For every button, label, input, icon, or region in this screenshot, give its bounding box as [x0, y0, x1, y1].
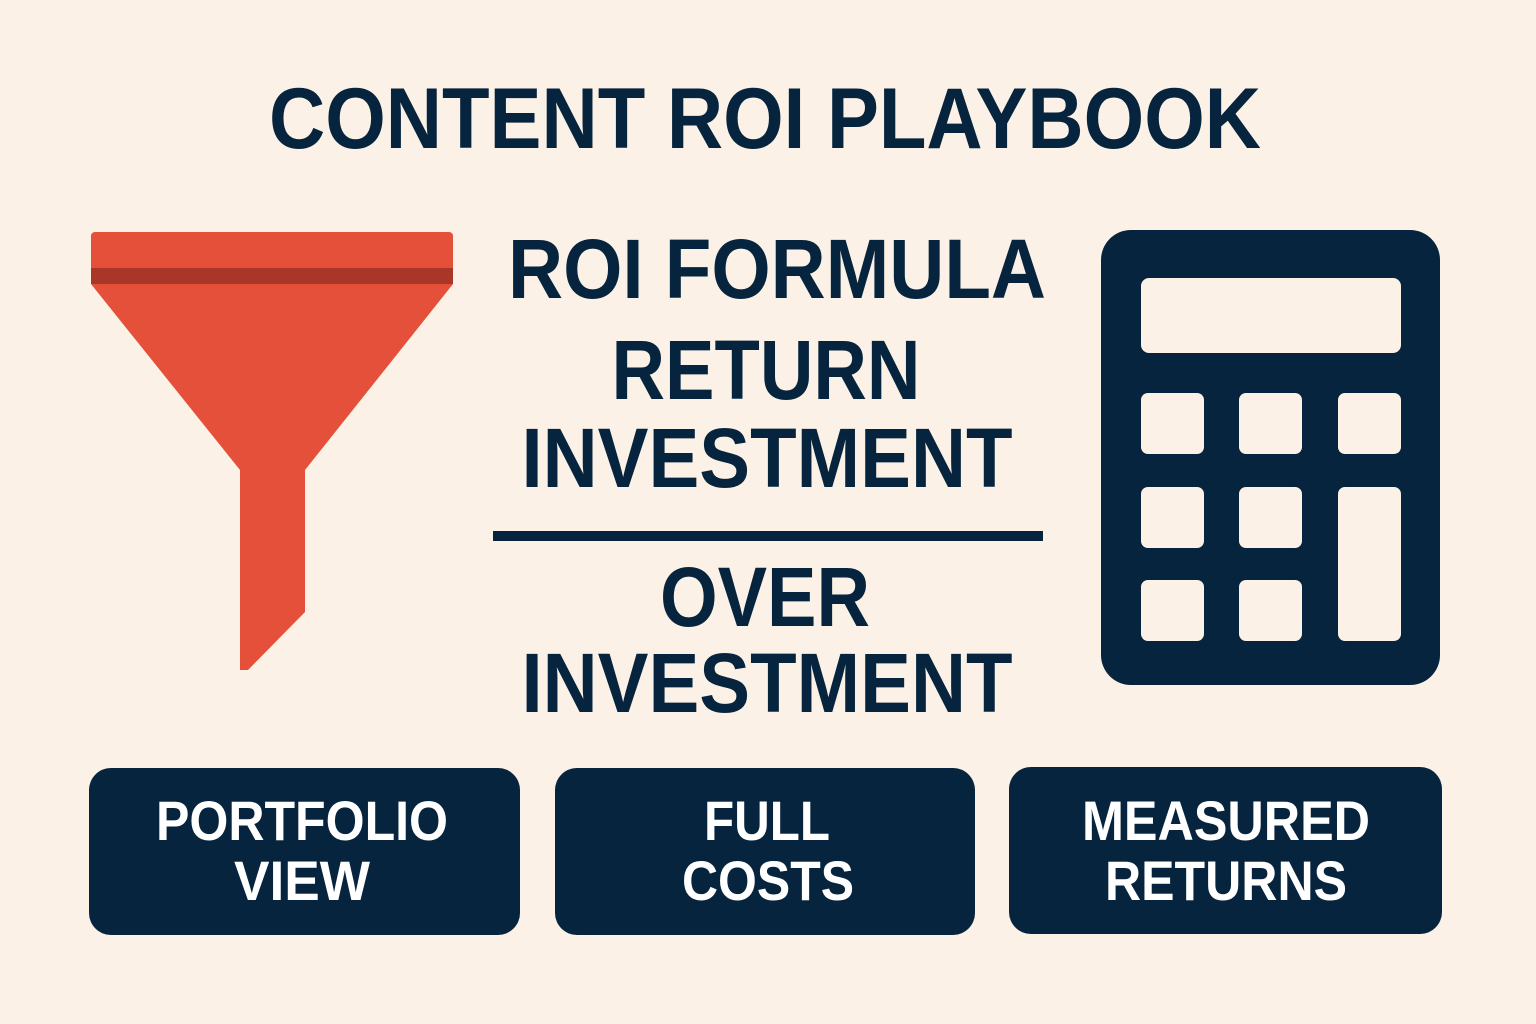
formula text: ROI FORMULA [508, 222, 1046, 316]
box: portfolio view: VIEW [234, 849, 370, 912]
icon: calculator [1101, 230, 1440, 685]
box: measured returns: RETURNS [1105, 849, 1347, 912]
box: full costs: FULL [704, 789, 830, 852]
box: measured returns [1009, 767, 1442, 934]
box: measured returns: MEASURED [1082, 789, 1370, 852]
formula text [493, 222, 1046, 730]
formula text: OVER [660, 550, 870, 644]
formula text: INVESTMENT [522, 636, 1012, 730]
formula text: RETURN [612, 323, 920, 417]
formula text: INVESTMENT [522, 411, 1012, 505]
icon: funnel [91, 232, 453, 670]
box: portfolio view: PORTFOLIO [156, 789, 448, 852]
box: portfolio view [89, 768, 520, 935]
title: CONTENT ROI PLAYBOOK [269, 71, 1261, 167]
box: full costs [555, 768, 975, 935]
box: full costs: COSTS [682, 849, 854, 912]
